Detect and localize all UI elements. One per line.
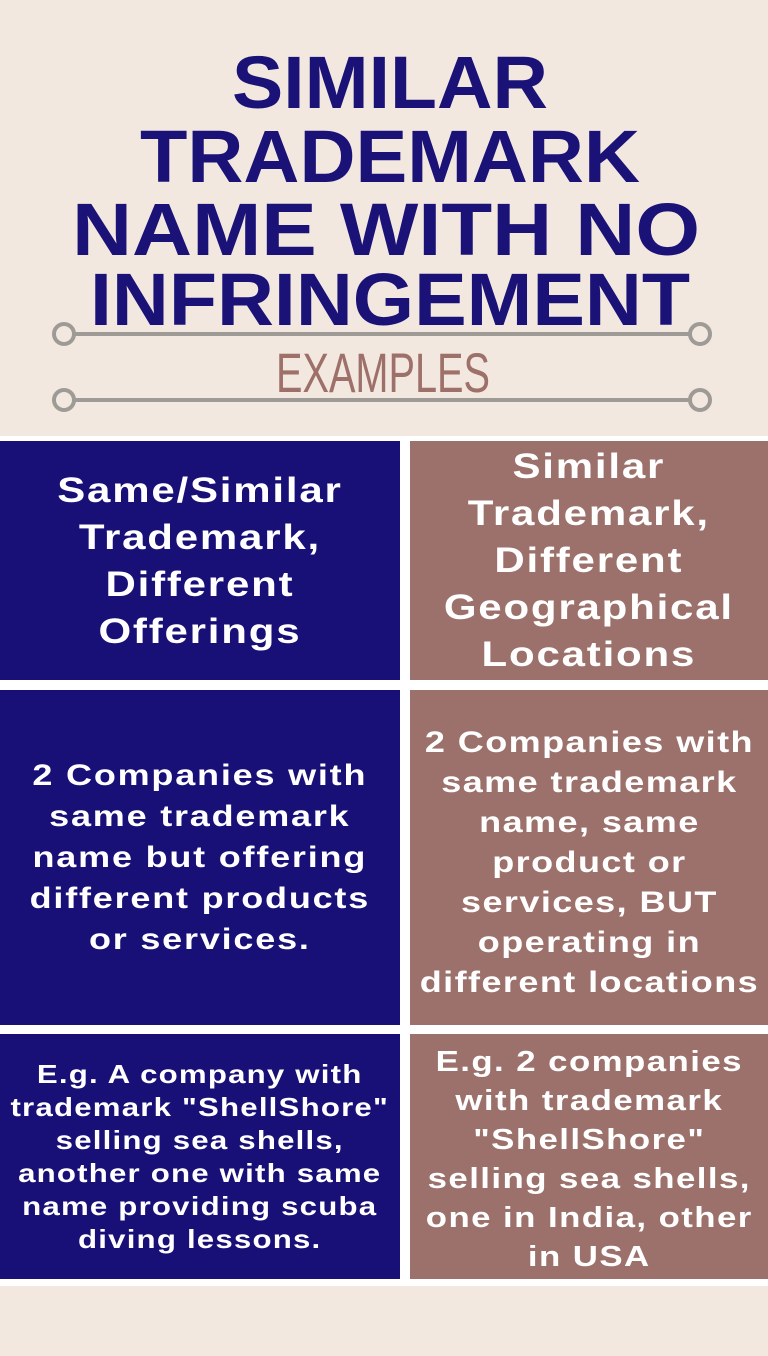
panel: right description (410, 690, 768, 1025)
panel: right description: same trademark (441, 766, 737, 798)
panel: left example: selling sea shells, (56, 1124, 344, 1154)
panel: left example: another one with same (18, 1158, 382, 1188)
title: INFRINGEMENT (90, 258, 690, 341)
panel: left description: or services. (89, 923, 311, 956)
panel: left description: name but offering (33, 841, 367, 874)
panel: left example: diving lessons. (78, 1224, 322, 1254)
panel: right example (410, 1034, 768, 1279)
panel: left example (0, 1034, 400, 1279)
title: SIMILAR (232, 41, 548, 124)
panel: right description: operating in (477, 926, 701, 958)
panel: right description: name, same (479, 806, 699, 838)
panel: right example: in USA (528, 1240, 650, 1272)
panel: left example: trademark "ShellShore" (11, 1092, 389, 1122)
panel: left example: name providing scuba (22, 1190, 378, 1220)
title: EXAMPLES (276, 341, 490, 404)
title: NAME WITH NO (72, 188, 700, 271)
panel: right description: services, BUT (461, 886, 717, 918)
panel: right example: selling sea shells, (427, 1162, 751, 1194)
panel: left description (0, 690, 400, 1025)
panel: right example: with trademark (455, 1084, 723, 1116)
panel: left description: same trademark (49, 800, 351, 833)
panel: right description: 2 Companies with (424, 726, 754, 758)
panel: left description: different products (30, 882, 370, 915)
panel: left header: Different (106, 564, 294, 604)
panel: right header: Locations (482, 635, 696, 674)
panel: left description: 2 Companies with (33, 759, 367, 792)
panel: right description: product or (492, 846, 686, 878)
panel: left header: Same/Similar (57, 470, 343, 510)
panel: right header: Different (495, 541, 683, 580)
panel: left header: Offerings (99, 612, 301, 650)
title: TRADEMARK (140, 115, 640, 198)
grid background (0, 436, 768, 1286)
panel: right header: Similar (513, 447, 665, 486)
panel: right example: "ShellShore" (473, 1124, 705, 1156)
panel: right description: different locations (419, 966, 759, 998)
panel: left header: Trademark, (79, 518, 321, 556)
panel: left example: E.g. A company with (37, 1058, 363, 1088)
panel: right example: E.g. 2 companies (435, 1046, 743, 1078)
panel: right header: Trademark, (468, 494, 710, 533)
title (52, 41, 712, 412)
panel: left header (0, 441, 400, 680)
panel: right example: one in India, other (425, 1202, 753, 1234)
panel: right header (410, 441, 768, 680)
panel: right header: Geographical (444, 588, 734, 627)
